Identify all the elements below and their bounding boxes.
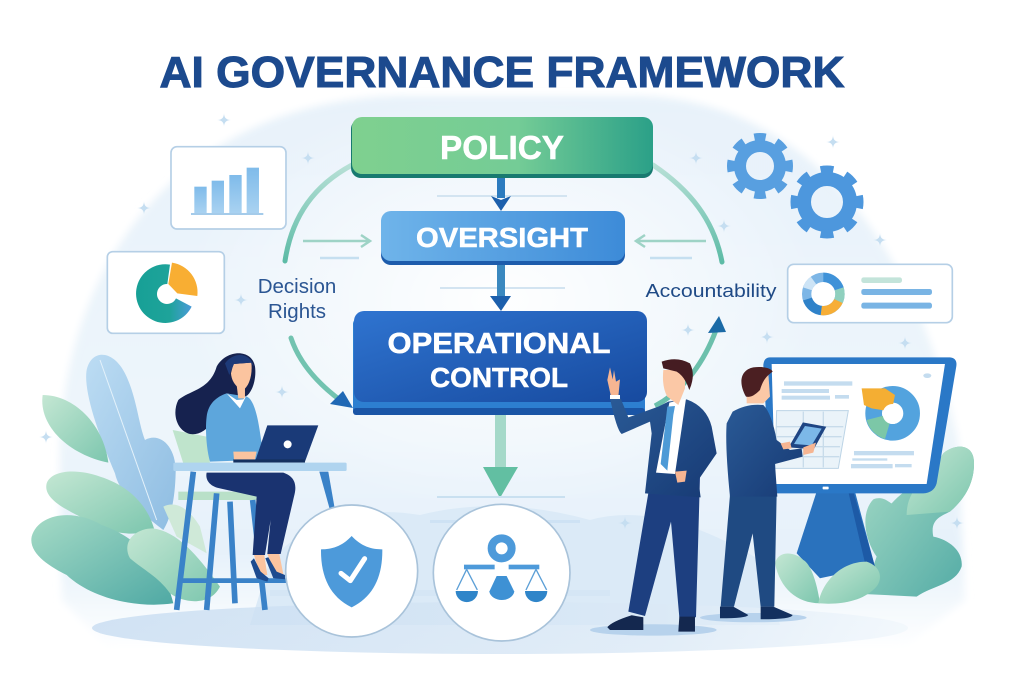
neck and collar [237, 385, 245, 398]
panel: pie chart [107, 252, 224, 333]
trousers [628, 473, 700, 617]
panel: donut list [788, 264, 952, 323]
illustration: monitor [763, 357, 956, 578]
icon: gears [731, 137, 859, 234]
sparkles [39, 113, 964, 530]
shoes [720, 607, 793, 619]
shoes [607, 615, 695, 632]
fist and raised hand [607, 367, 687, 483]
stool [178, 492, 257, 500]
arrow: policy to oversight [437, 178, 567, 211]
hand [233, 452, 257, 459]
arrow: control to principles [437, 414, 565, 498]
head [663, 370, 685, 405]
shoes [254, 554, 284, 577]
illustration: principle circle shield [286, 505, 418, 637]
illustration: presenting man [590, 359, 717, 636]
label: decision rights: Rights [268, 300, 326, 323]
background blob [60, 96, 965, 650]
illustration: woman at desk [173, 353, 347, 610]
tablet [790, 423, 825, 448]
ground [92, 602, 908, 654]
illustration: small front leaves [775, 554, 880, 604]
illustration: man with tablet [700, 367, 825, 622]
laptop [255, 425, 318, 462]
hair [175, 353, 255, 434]
arrow: oversight to control [440, 265, 565, 311]
illustration: right foliage [863, 447, 974, 597]
arrow: into oversight right [636, 235, 706, 258]
table [173, 463, 347, 471]
box: policy [351, 117, 653, 178]
box: operational control: OPERATIONAL [388, 328, 610, 360]
legs [206, 473, 295, 555]
jacket [726, 405, 803, 497]
label: decision rights: Decision [258, 275, 336, 298]
tie [661, 406, 675, 471]
arrow: decision rights [291, 338, 353, 408]
box: operational control: CONTROL [430, 362, 568, 393]
box: oversight: OVERSIGHT [416, 222, 588, 253]
arrow: into oversight left [303, 235, 370, 258]
illustration: left foliage [31, 355, 220, 605]
box: oversight [381, 211, 625, 265]
box: operational control [353, 311, 647, 415]
face [231, 363, 252, 390]
arrow: accountability [655, 316, 726, 406]
jacket [610, 398, 717, 497]
shirt [656, 399, 686, 474]
head [747, 373, 770, 403]
box: policy: POLICY [440, 129, 564, 166]
report donut [874, 394, 912, 432]
arc: upper left [285, 165, 352, 261]
arc: upper right [653, 165, 722, 262]
illustration: principle circle scales [433, 504, 570, 641]
blouse [206, 393, 262, 462]
title: AI GOVERNANCE FRAMEWORK [160, 48, 845, 97]
label: accountability: Accountability [646, 280, 777, 301]
panel: bar chart [171, 147, 286, 229]
trousers [721, 495, 777, 607]
chair [173, 430, 210, 463]
